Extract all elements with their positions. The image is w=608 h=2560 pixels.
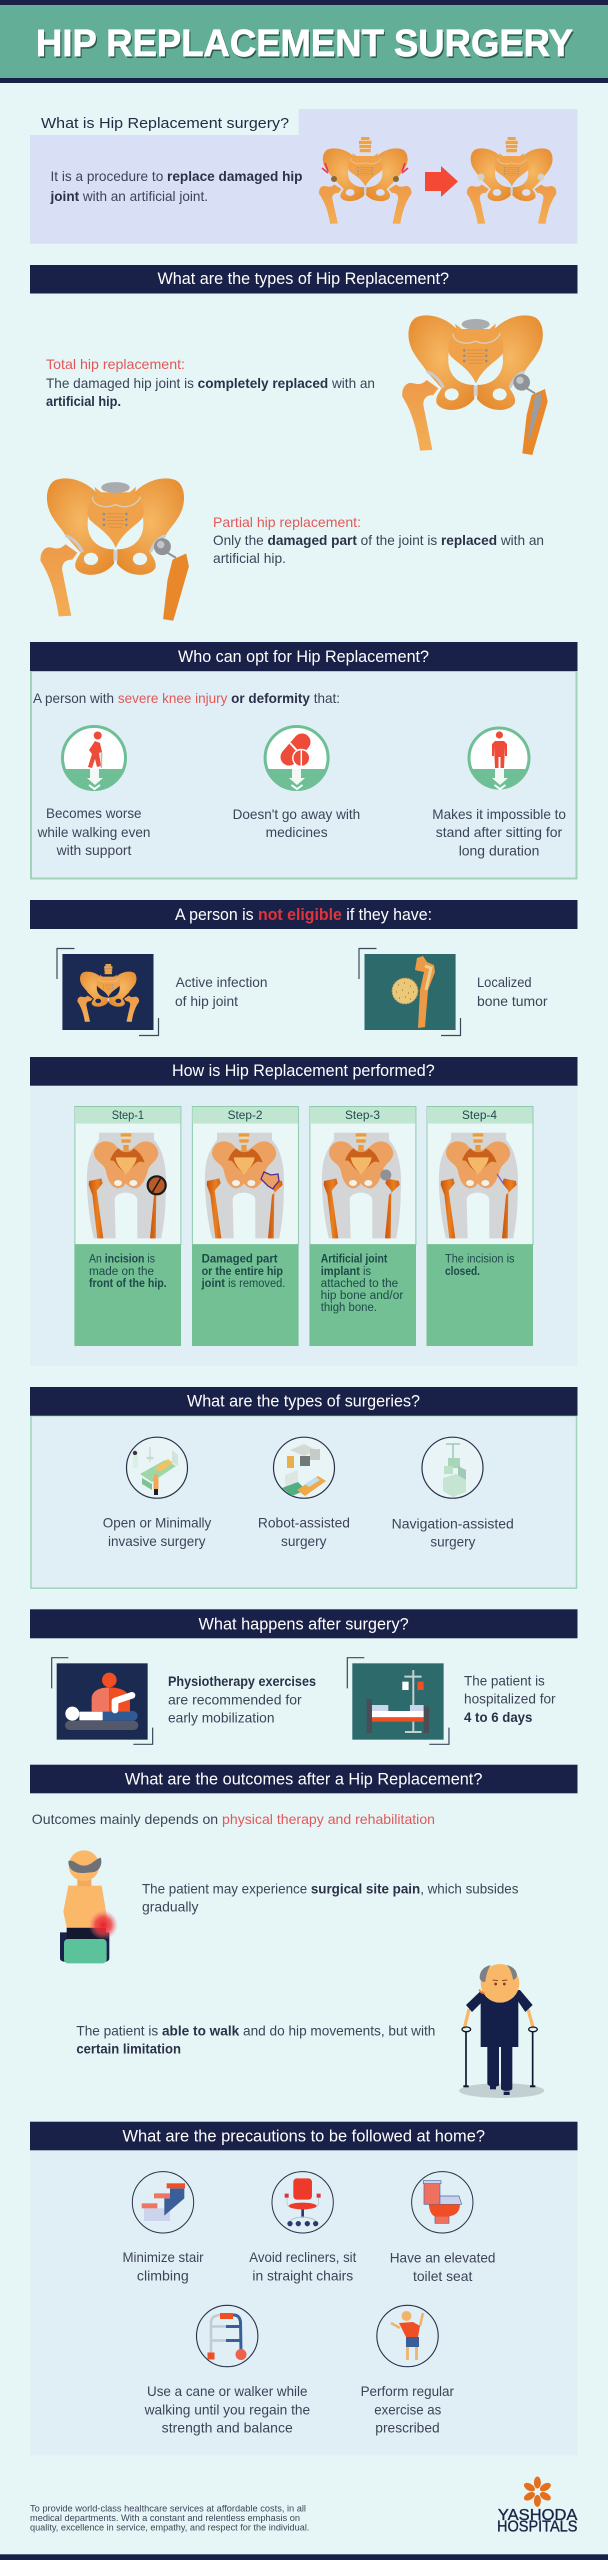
step 1: front of the hip. <box>89 1278 167 1290</box>
title banner <box>0 0 608 83</box>
icon: chair <box>272 2172 333 2233</box>
step 3: attached to the <box>321 1278 398 1290</box>
text: partial hip replacement <box>213 514 544 566</box>
text: robot surgery: Robot-assisted <box>258 1515 350 1531</box>
header: precautions <box>30 2122 578 2150</box>
text: medicines: medicines <box>266 824 328 840</box>
step 4: closed. <box>445 1266 480 1278</box>
footer bar <box>0 2554 608 2560</box>
icon: stairs <box>132 2172 194 2233</box>
text: exercise: Perform regular <box>361 2383 454 2399</box>
text: toilet seat: Have an elevated <box>390 2250 496 2266</box>
card: active infection: of hip joint <box>175 993 238 1009</box>
text: definition: joint with an artificial joint. <box>50 188 208 204</box>
panel: what is hip replacement <box>30 109 578 244</box>
step 4: Step-4 <box>462 1110 498 1122</box>
logo: yashoda hospitals <box>497 2476 578 2536</box>
text: impossible to stand: long duration <box>459 842 539 858</box>
panel: who can opt <box>30 642 578 878</box>
header: outcomes <box>30 1765 578 1793</box>
header: not eligible: A person is not eligible if they have: <box>175 905 432 924</box>
step 3: thigh bone. <box>321 1302 377 1314</box>
text: chairs: in straight chairs <box>252 2267 353 2283</box>
step 1 <box>74 1106 181 1346</box>
icon: walking person <box>62 726 126 791</box>
card: active infection <box>57 948 268 1036</box>
icon: physiotherapy <box>52 1658 153 1744</box>
header: precautions: What are the precautions to be followed at home? <box>122 2127 485 2146</box>
text: hospital stay: hospitalized for <box>464 1691 556 1707</box>
text: total hip replacement: Total hip replacement: <box>46 356 185 372</box>
text: toilet seat <box>390 2250 496 2284</box>
logo: yashoda hospitals: YASHODA <box>498 2507 578 2524</box>
icon: pills <box>265 726 328 791</box>
text: hospital stay: The patient is <box>464 1672 545 1688</box>
text: mission statement: quality, excellence in service, empathy, and respect for the individual. <box>30 2522 309 2532</box>
step 3: Artificial joint <box>321 1254 388 1266</box>
text: chairs <box>249 2249 356 2283</box>
step 2: or the entire hip <box>202 1266 283 1278</box>
icon: navigation surgery <box>422 1437 483 1498</box>
icon: partial hip implant pelvis <box>41 478 189 621</box>
text: robot surgery: surgery <box>281 1533 326 1549</box>
text: exercise <box>361 2383 454 2436</box>
text: impossible to stand: Makes it impossible to <box>432 806 566 822</box>
text: stair climbing: climbing <box>137 2267 189 2283</box>
text: navigation surgery <box>392 1515 514 1550</box>
icon: toilet <box>412 2172 473 2233</box>
text: hospital stay: 4 to 6 days <box>464 1709 533 1725</box>
card: active infection: Active infection <box>176 974 268 990</box>
text: navigation surgery: Navigation-assisted <box>392 1515 514 1531</box>
text: able to walk: The patient is able to walk and do hip movements, but with <box>76 2023 435 2039</box>
text: physiotherapy <box>168 1673 316 1726</box>
icon: replaced hip <box>467 137 556 224</box>
text: physiotherapy: Physiotherapy exercises <box>168 1673 316 1689</box>
header: not eligible <box>30 900 578 929</box>
text: medicines <box>233 806 360 840</box>
text: walker: Use a cane or walker while <box>147 2383 308 2399</box>
heading: what is hip replacement: What is Hip Replacement surgery? <box>41 115 289 132</box>
header: how performed <box>30 1057 578 1086</box>
text: walker <box>144 2383 310 2436</box>
panel: precautions <box>30 2122 578 2455</box>
step 1: made on the <box>89 1266 154 1278</box>
text: medicines: Doesn't go away with <box>233 806 360 822</box>
text: open surgery: Open or Minimally <box>103 1515 211 1531</box>
text: stair climbing: Minimize stair <box>122 2249 204 2265</box>
text: becomes worse: while walking even <box>37 824 150 840</box>
step 4 <box>426 1106 533 1346</box>
card: bone tumor <box>359 948 548 1036</box>
step 4: The incision is <box>445 1254 515 1266</box>
text: partial hip replacement: Partial hip replacement: <box>213 514 361 530</box>
text: toilet seat: toilet seat <box>413 2268 472 2284</box>
text: impossible to stand <box>432 806 566 858</box>
step 2: Damaged part <box>202 1254 278 1266</box>
step 1: Step-1 <box>112 1110 144 1122</box>
text: surgical site pain: The patient may experience surgical site pain, which subsides <box>142 1880 518 1896</box>
header: what happens after: What happens after surgery? <box>198 1614 409 1633</box>
text: partial hip replacement: Only the damaged part of the joint is replaced with an <box>213 532 544 548</box>
icon: old man with canes <box>459 1964 544 2098</box>
text: who intro: A person with severe knee injury or deformity that: <box>33 690 340 706</box>
header: who can opt: Who can opt for Hip Replacement? <box>178 647 429 666</box>
text: exercise: exercise as <box>374 2401 441 2417</box>
step 1: An incision is <box>89 1254 155 1266</box>
text: able to walk: certain limitation <box>76 2041 181 2057</box>
logo: yashoda hospitals: HOSPITALS <box>497 2519 577 2536</box>
text: becomes worse: with support <box>56 842 132 858</box>
icon: walker <box>196 2305 258 2367</box>
text: definition <box>50 168 303 204</box>
text: mission statement: To provide world-class healthcare services at affordable costs, in all <box>30 2504 306 2514</box>
text: mission statement <box>30 2504 309 2532</box>
header: what happens after <box>30 1609 578 1638</box>
icon: red arrow <box>425 166 458 197</box>
title banner: HIP REPLACEMENT SURGERY <box>36 23 573 65</box>
card: bone tumor: bone tumor <box>477 993 548 1009</box>
panel: types of surgeries <box>30 1387 578 1588</box>
step 2: Step-2 <box>228 1110 262 1122</box>
step 3: Step-3 <box>345 1110 380 1122</box>
text: chairs: Avoid recliners, sit <box>249 2249 356 2265</box>
text: open surgery: invasive surgery <box>108 1533 206 1549</box>
text: becomes worse <box>37 805 150 858</box>
text: open surgery <box>103 1515 211 1549</box>
text: total hip replacement: artificial hip. <box>46 393 121 409</box>
card: hospital stay <box>347 1658 556 1744</box>
icon: damaged hip <box>319 137 412 224</box>
step 3: implant is <box>321 1266 371 1278</box>
text: walker: strength and balance <box>162 2420 293 2436</box>
step 2 <box>192 1106 299 1346</box>
step 3 <box>309 1106 416 1346</box>
icon: hospital bed <box>347 1658 449 1744</box>
text: surgical site pain: gradually <box>142 1899 198 1915</box>
icon: exercise <box>377 2305 438 2367</box>
text: outcomes intro: Outcomes mainly depends on physical therapy and rehabilitation <box>32 1811 435 1827</box>
text: physiotherapy: early mobilization <box>168 1710 274 1726</box>
text: becomes worse: Becomes worse <box>46 805 142 821</box>
text: physiotherapy: are recommended for <box>168 1691 302 1707</box>
text: total hip replacement: The damaged hip joint is completely replaced with an <box>46 375 375 391</box>
step 2: joint is removed. <box>201 1278 285 1290</box>
icon: open surgery <box>126 1437 188 1498</box>
icon: robot surgery <box>274 1437 334 1498</box>
header: types of surgeries: What are the types of surgeries? <box>187 1392 420 1411</box>
header: types of hip replacement: What are the types of Hip Replacement? <box>158 269 449 288</box>
text: hospital stay <box>464 1672 556 1725</box>
text: robot surgery <box>258 1515 350 1549</box>
header: types of surgeries <box>30 1387 578 1416</box>
icon: total hip implant pelvis <box>402 315 548 455</box>
header: outcomes: What are the outcomes after a Hip Replacement? <box>125 1769 482 1788</box>
text: able to walk <box>76 2023 435 2057</box>
header: who can opt <box>30 642 578 671</box>
card: bone tumor: Localized <box>477 974 532 990</box>
text: stair climbing <box>122 2249 204 2283</box>
text: navigation surgery: surgery <box>430 1534 475 1550</box>
card: physiotherapy <box>52 1658 316 1744</box>
text: mission statement: medical departments. With a constant and relentless emphasis on <box>30 2513 300 2523</box>
text: impossible to stand: stand after sitting for <box>436 824 563 840</box>
text: total hip replacement <box>46 356 375 409</box>
step 3: hip bone and/or <box>321 1290 403 1302</box>
title banner: HIP REPLACEMENT SURGERY <box>38 25 574 67</box>
header: how performed: How is Hip Replacement performed? <box>172 1061 435 1080</box>
text: definition: It is a procedure to replace damaged hip <box>50 168 302 184</box>
icon: standing person <box>469 728 529 790</box>
text: surgical site pain <box>142 1880 518 1915</box>
text: partial hip replacement: artificial hip. <box>213 550 286 566</box>
header: types of hip replacement <box>30 265 578 294</box>
text: walker: walking until you regain the <box>144 2401 310 2417</box>
panel: how performed <box>30 1057 578 1366</box>
icon: seated patient with pain <box>60 1850 118 1963</box>
text: exercise: prescribed <box>375 2420 440 2436</box>
